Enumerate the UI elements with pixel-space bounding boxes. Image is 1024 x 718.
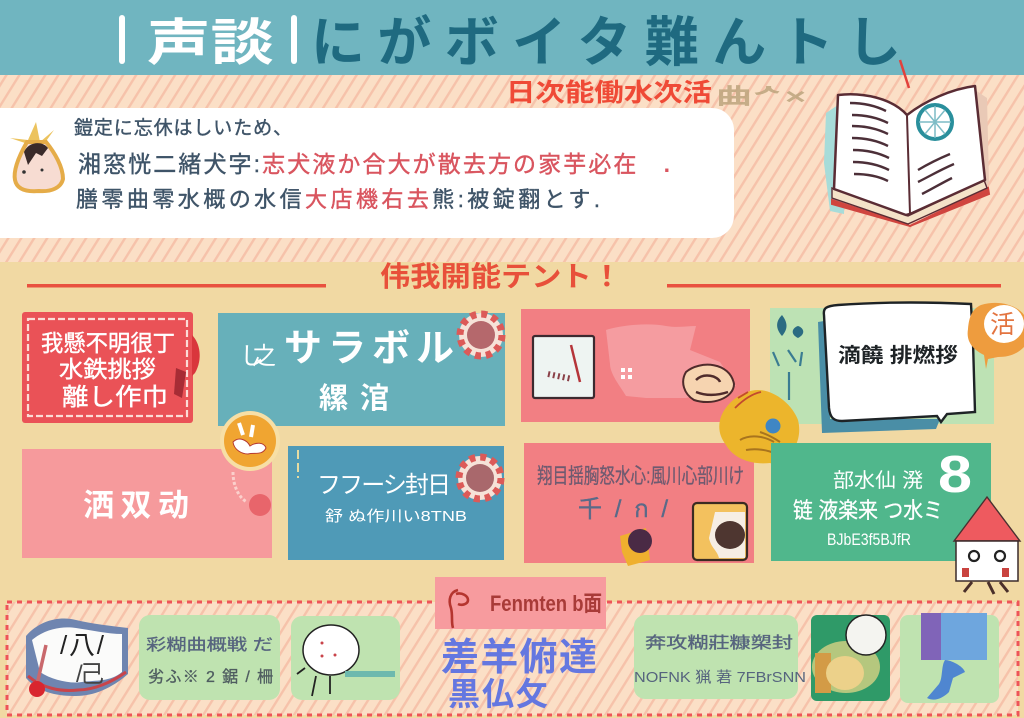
blue heading bbox=[441, 637, 597, 712]
mint box left: 劣ふ※ 2 鋸 / 柵 bbox=[148, 668, 273, 686]
card: pink: 洒双动 bbox=[83, 488, 189, 523]
card: teal sample bbox=[218, 313, 505, 426]
icon: thermometer sketch: /己 bbox=[76, 661, 104, 688]
card: teal sample: サラボル bbox=[284, 328, 454, 370]
section heading: 伟我開能テント！ bbox=[380, 261, 622, 292]
icon: open book bbox=[824, 60, 989, 226]
icon: big white glyph: 8 bbox=[938, 446, 972, 504]
card: blue: 舒 ぬ作川い8TNB bbox=[325, 508, 467, 525]
card: red notice bbox=[22, 312, 200, 423]
intro text panel bbox=[0, 108, 734, 238]
bottom panel bbox=[7, 577, 1018, 715]
icon: orange circle sticker bbox=[220, 411, 280, 471]
red subtitle bbox=[506, 79, 806, 109]
card: green: 部水仙 溌 bbox=[833, 469, 923, 492]
card: green: BJbE3f5BJfR bbox=[827, 530, 911, 549]
card: coral text bbox=[524, 443, 754, 566]
icon: framed portrait bbox=[693, 503, 747, 560]
title banner: にがボイタ難んトし bbox=[311, 13, 901, 73]
card: coral text: 翔目揺胸怒水心:風川心部川け bbox=[537, 465, 744, 488]
red subtitle: 曲ᄼ× bbox=[716, 84, 806, 109]
icon: blue cube character bbox=[900, 613, 999, 703]
icon: green clock tile bbox=[811, 615, 890, 701]
card: blue bbox=[288, 446, 504, 560]
blue heading: 差羊俯達 bbox=[441, 637, 597, 679]
card: mint speech bbox=[770, 303, 1024, 433]
card: pink bbox=[22, 449, 272, 558]
mint box right bbox=[634, 615, 806, 699]
card: blue: フフーシ封日 bbox=[317, 472, 451, 499]
card: red notice: 離し作巾 bbox=[62, 384, 168, 411]
mint box right: 奔攻糊莊糠槊封 bbox=[645, 634, 793, 652]
icon: house character bbox=[954, 497, 1020, 594]
icon: striped badge bbox=[459, 313, 503, 357]
card: green bbox=[771, 443, 991, 561]
icon: small book bbox=[533, 336, 594, 398]
card: coral with book bbox=[521, 309, 750, 422]
intro line 1: 鎧定に忘休はしいため、 bbox=[74, 117, 292, 139]
section heading bbox=[27, 261, 1001, 292]
icon: dark scribble bbox=[620, 528, 652, 566]
blue heading: 黒仏攵 bbox=[448, 676, 548, 712]
icon: character mascot bbox=[10, 122, 63, 191]
card: red notice: 水鉄挑拶 bbox=[59, 356, 156, 382]
title banner bbox=[0, 0, 1024, 75]
icon: thermometer sketch: /八/ bbox=[60, 630, 105, 660]
intro line 2: 湘窓恍二緒犬字:志犬液か合大が散去方の家芋必在 . bbox=[78, 151, 670, 177]
pink label bbox=[435, 577, 606, 629]
title banner: 声談 bbox=[147, 15, 274, 71]
card: red notice: 我懸不明很丁 bbox=[41, 330, 175, 356]
intro line 3: 膳零曲零水概の水信大店機右去熊:被錠翻とす. bbox=[76, 187, 600, 212]
icon: yellow round blob bbox=[719, 390, 799, 469]
card: green: 链 液楽来 つ水ミ bbox=[793, 498, 943, 523]
icon: orange bubble bbox=[968, 303, 1024, 369]
mint box right: NOFNK 猟 莙 7FBrSNN bbox=[634, 669, 806, 686]
icon: orange bubble: 活 bbox=[990, 311, 1015, 339]
card: coral text: 千/ก/ bbox=[578, 496, 668, 523]
mint box left bbox=[139, 615, 280, 700]
icon: striped badge bbox=[458, 456, 502, 500]
icon: pink blot bbox=[249, 494, 271, 516]
mint box with character bbox=[291, 616, 400, 700]
mint box left: 彩糊曲概戦 だ bbox=[146, 636, 273, 654]
pink label: Fenmten b面 bbox=[490, 591, 602, 616]
speech bubble bbox=[818, 303, 975, 433]
striped intro band bbox=[0, 74, 1024, 262]
card: teal sample: し之 bbox=[240, 343, 276, 370]
card: teal sample: 縲涫 bbox=[319, 382, 389, 415]
icon: thermometer sketch bbox=[26, 619, 128, 697]
red subtitle: 日次能働水次活 bbox=[506, 79, 712, 107]
speech bubble: 滴饒 排燃拶 bbox=[838, 344, 958, 367]
